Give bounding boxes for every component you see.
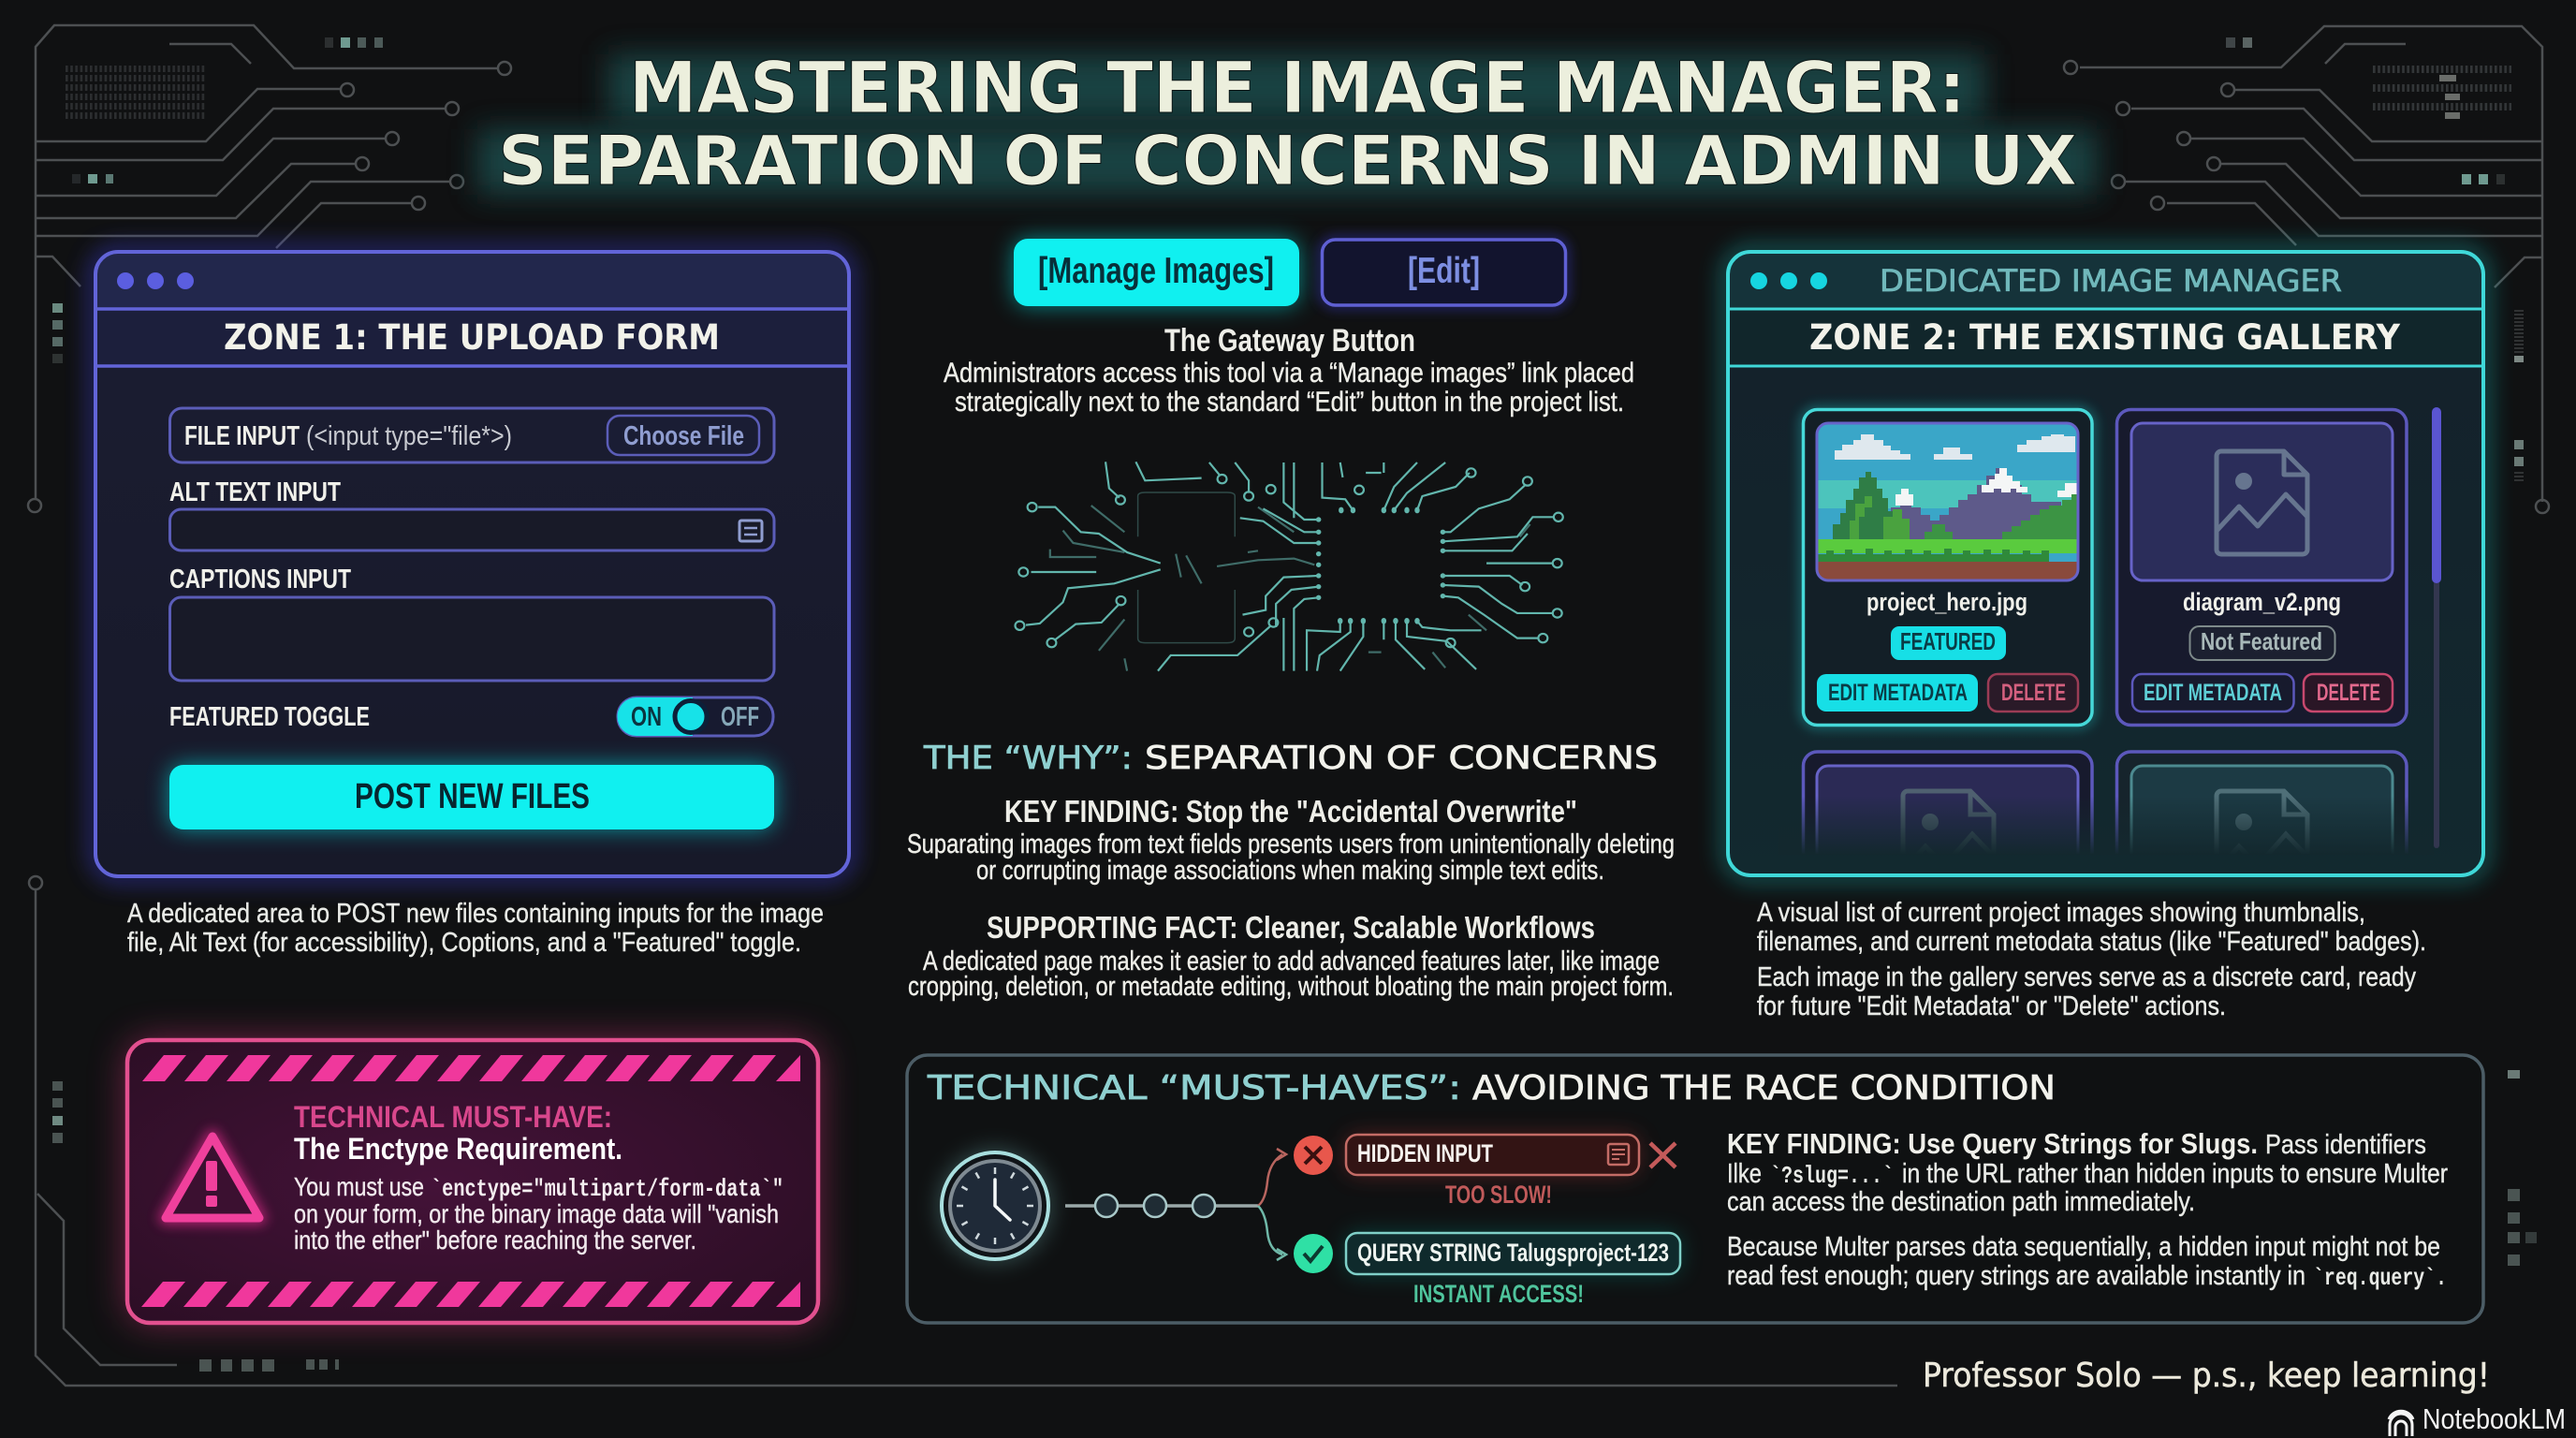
gateway buttons: [Manage Images] (1038, 251, 1274, 291)
text block: supporting fact: cropping, deletion, or metadate editing, without bloating the main project form. (908, 972, 1674, 1002)
alert text: into the ether" before reaching the server. (294, 1225, 696, 1255)
title (477, 46, 2097, 201)
card: project_hero.jpg: FEATURED (1900, 627, 1996, 655)
arrow: to query string (1258, 1206, 1286, 1260)
captions input: CAPTIONS INPUT (169, 565, 351, 594)
panel: technical must-have alert (127, 1040, 818, 1323)
zone 2 caption: A visual list of current project images showing thumbnalis, (1757, 898, 2365, 928)
title: MASTERING THE IMAGE MANAGER: (629, 46, 1966, 129)
decoration: top-right circuit traces (2064, 26, 2549, 1266)
cards: fading lower row (1801, 750, 2408, 852)
illustration: circuit chip (1016, 462, 1563, 671)
featured toggle: OFF (721, 702, 759, 732)
delete button (1988, 674, 2078, 712)
file input: Choose File (623, 421, 744, 451)
hidden input row: TOO SLOW! (1445, 1181, 1552, 1209)
gateway buttons (1014, 239, 1565, 306)
panel heading: TECHNICAL “MUST-HAVES”: (927, 1069, 1461, 1108)
card: diagram_v2.png: EDIT METADATA (2144, 680, 2282, 706)
hidden input row: HIDDEN INPUT (1357, 1139, 1493, 1167)
zone 2 caption: filenames, and current metodata status (like "Featured" badges). (1757, 927, 2426, 957)
text block: query strings finding: read fest enough; query strings are available instantly in (1727, 1261, 2305, 1291)
gateway description: strategically next to the standard “Edit” button in the project list. (955, 387, 1624, 418)
file input: (<input type="file*>) (306, 421, 512, 451)
alert text (294, 1100, 783, 1255)
title: SEPARATION OF CONCERNS IN ADMIN UX (498, 122, 2077, 201)
card: diagram_v2.png: diagram_v2.png (2183, 588, 2341, 616)
text block: key finding (907, 794, 1675, 886)
post new files button: POST NEW FILES (355, 777, 590, 816)
heading: the why: THE “WHY”: (923, 740, 1133, 777)
window dots (117, 272, 194, 289)
text block: query strings finding: in the URL rather than hidden inputs to ensure Multer (1902, 1159, 2448, 1189)
text block: key finding: Suparating images from text fields presents users from unintentionally deleting (907, 829, 1675, 859)
gateway description (944, 323, 1634, 418)
arrow: to hidden input (1258, 1149, 1286, 1206)
decoration: top-left circuit traces (28, 25, 511, 512)
panel: zone 1 upload form (95, 252, 849, 876)
panel heading: ZONE 2: THE EXISTING GALLERY (1809, 317, 2401, 358)
panel heading (927, 1069, 2056, 1108)
window title: DEDICATED IMAGE MANAGER (1880, 263, 2342, 299)
post new files button (169, 765, 774, 829)
query string row: INSTANT ACCESS! (1413, 1280, 1584, 1308)
zone 1 caption (127, 899, 824, 958)
gateway description: The Gateway Button (1164, 323, 1415, 359)
heading: the why: SEPARATION OF CONCERNS (1145, 740, 1658, 777)
alert text: TECHNICAL MUST-HAVE: (294, 1100, 612, 1134)
heading: the why (923, 740, 1658, 777)
text block: key finding: or corrupting image associations when making simple text edits. (976, 856, 1604, 886)
text block: query strings finding: Pass identifiers (2265, 1130, 2426, 1160)
text block: query strings finding: Ilke (1727, 1159, 1762, 1189)
alt text input: ALT TEXT INPUT (169, 477, 341, 507)
hazard stripes top (142, 1055, 800, 1081)
text block: supporting fact (908, 910, 1674, 1002)
panel: technical must-haves race condition (907, 1055, 2483, 1323)
featured toggle (169, 697, 773, 736)
featured toggle: ON (631, 702, 662, 732)
zone 1 caption: A dedicated area to POST new files containing inputs for the image (127, 899, 824, 929)
zone 2 caption: Each image in the gallery serves serve as a discrete card, ready (1757, 962, 2416, 992)
text block: supporting fact: A dedicated page makes it easier to add advanced features later, like image (923, 946, 1660, 976)
captions input (169, 565, 774, 681)
hazard stripes bottom (141, 1282, 800, 1307)
gateway buttons: [Edit] (1408, 251, 1480, 291)
text block: supporting fact: SUPPORTING FACT: Cleaner, Scalable Workflows (987, 910, 1595, 945)
gateway description: Administrators access this tool via a “Manage images” link placed (944, 358, 1634, 389)
panel heading: AVOIDING THE RACE CONDITION (1472, 1069, 2056, 1108)
text block: query strings finding: KEY FINDING: Use Query Strings for Slugs. (1727, 1127, 2258, 1160)
text block: query strings finding: can access the destination path immediately. (1727, 1187, 2195, 1217)
card: diagram_v2.png (2117, 410, 2407, 725)
filename: project_hero.jpg (1866, 588, 2027, 616)
file input: FILE INPUT (184, 421, 300, 451)
text block: query strings finding (1727, 1127, 2448, 1292)
query string row: QUERY STRING Talugsproject-123 (1357, 1239, 1669, 1267)
text block: query strings finding: `req.query`. (2313, 1264, 2447, 1292)
text block: key finding: KEY FINDING: Stop the "Accidental Overwrite" (1004, 794, 1577, 829)
panel: zone 2 gallery (1708, 232, 2503, 895)
decoration: bottom-left circuit frame (29, 876, 1897, 1386)
alert text: You must use (294, 1172, 424, 1201)
card: project_hero.jpg (1803, 410, 2092, 725)
footer credit: Professor Solo — p.s., keep learning! (1923, 1357, 2490, 1395)
alert text: `enctype="multipart/form-data`" (431, 1175, 783, 1203)
query string row (1294, 1233, 1680, 1308)
window dots (1750, 272, 1827, 289)
pixel art thumbnail (1817, 423, 2087, 580)
featured badge (1891, 626, 2006, 660)
timeline connector (1065, 1195, 1258, 1217)
featured toggle: FEATURED TOGGLE (169, 702, 370, 732)
alert text: The Enctype Requirement. (294, 1132, 622, 1166)
icon: image file (2217, 451, 2307, 554)
icon: warning triangle (166, 1137, 259, 1218)
scrollbar (2432, 407, 2441, 848)
not featured badge (2190, 626, 2334, 660)
zone 1 caption: file, Alt Text (for accessibility), Coptions, and a "Featured" toggle. (127, 928, 801, 958)
hidden input row (1294, 1135, 1676, 1209)
text block: query strings finding: `?slug=...` (1770, 1162, 1894, 1190)
file input (170, 408, 774, 462)
zone 2 caption: for future "Edit Metadata" or "Delete" actions. (1757, 991, 2226, 1021)
alert text: on your form, or the binary image data will "vanish (294, 1199, 779, 1228)
text block: query strings finding: Because Multer parses data sequentially, a hidden input might not be (1727, 1232, 2440, 1262)
panel heading: ZONE 1: THE UPLOAD FORM (224, 317, 720, 358)
card: project_hero.jpg: DELETE (2001, 680, 2066, 706)
zone 2 caption (1757, 898, 2426, 1021)
card: diagram_v2.png: Not Featured (2201, 627, 2322, 655)
card: project_hero.jpg: EDIT METADATA (1828, 680, 1968, 706)
alt text input (169, 477, 774, 550)
icon: clock (939, 1150, 1051, 1262)
edit metadata button (1817, 674, 1978, 712)
card: diagram_v2.png: DELETE (2317, 680, 2380, 706)
